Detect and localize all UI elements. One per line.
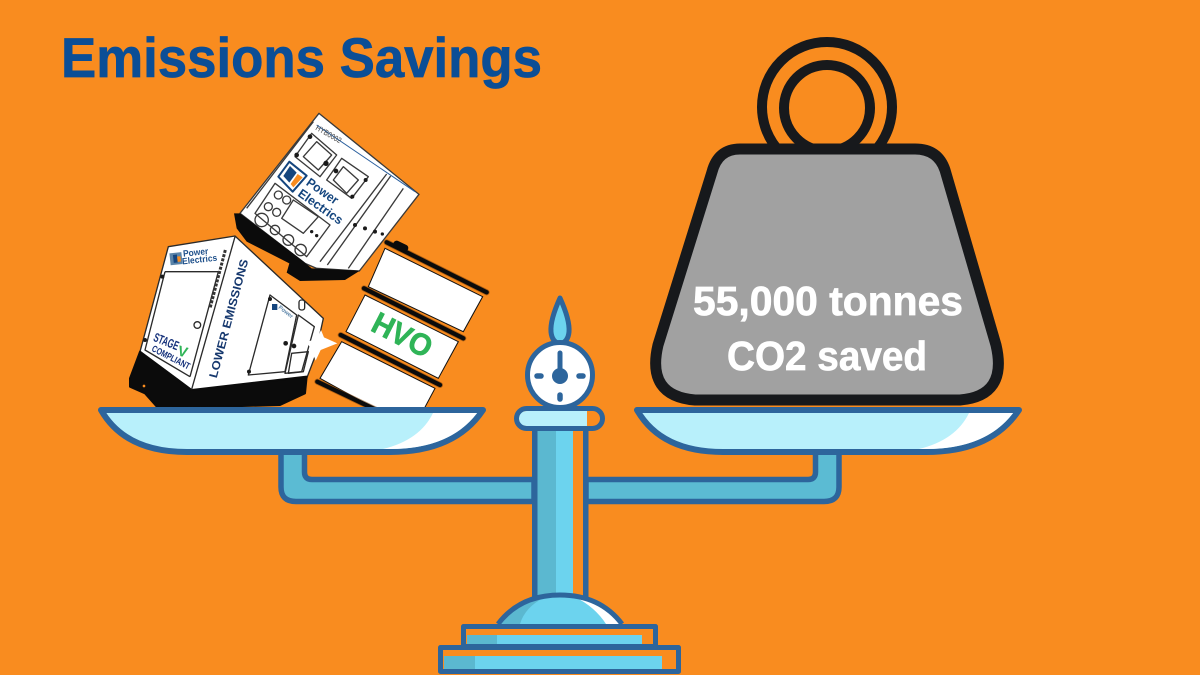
- icon: scale dial: [528, 342, 592, 408]
- compliant text: COMPLIANT: [150, 344, 192, 371]
- icon: stacked generators and HVO barrel: [130, 113, 487, 413]
- weight value: 55,000 tonnes: [693, 278, 963, 324]
- icon: white spark: [307, 330, 337, 361]
- weight caption: CO2 saved: [727, 333, 927, 379]
- scale column: [532, 430, 588, 598]
- icon: upper generator: Electrics: [295, 186, 346, 227]
- scale base upper tier: [464, 626, 656, 646]
- icon: flame finial: [551, 298, 569, 344]
- scale left arm: [281, 452, 534, 502]
- icon: weight handle: [762, 42, 892, 172]
- left pan: [101, 410, 483, 452]
- upper generator model text: HYB0002: [314, 123, 343, 145]
- icon: kilogram weight: [656, 42, 998, 400]
- icon: lower generator: Electrics: [181, 253, 218, 266]
- scale dome: [498, 595, 622, 624]
- lower generator side logo: Power: [277, 305, 294, 321]
- lower generator side logo: [272, 304, 294, 321]
- weight body: [656, 149, 998, 400]
- icon: HVO barrel: [317, 242, 487, 413]
- right pan: [637, 410, 1019, 452]
- icon: upper generator logo: [278, 162, 307, 192]
- scale base lower tier: [440, 648, 678, 672]
- icon: lower generator logo: [169, 252, 183, 265]
- HVO label: HVO: [366, 306, 438, 365]
- stage V text: STAGE: [152, 330, 181, 353]
- column cap: [516, 408, 602, 428]
- stage V letter: V: [176, 343, 190, 362]
- chart: balance scale: [101, 298, 1019, 672]
- title: Emissions Savings: [61, 26, 542, 89]
- icon: lower generator: [130, 236, 323, 408]
- icon: upper generator: [234, 113, 419, 281]
- scale right arm: [586, 452, 839, 502]
- lower generator brand text: Power: [182, 246, 209, 259]
- upper generator brand text: Power: [304, 175, 341, 207]
- lower emissions text: LOWER EMISSIONS: [207, 258, 251, 379]
